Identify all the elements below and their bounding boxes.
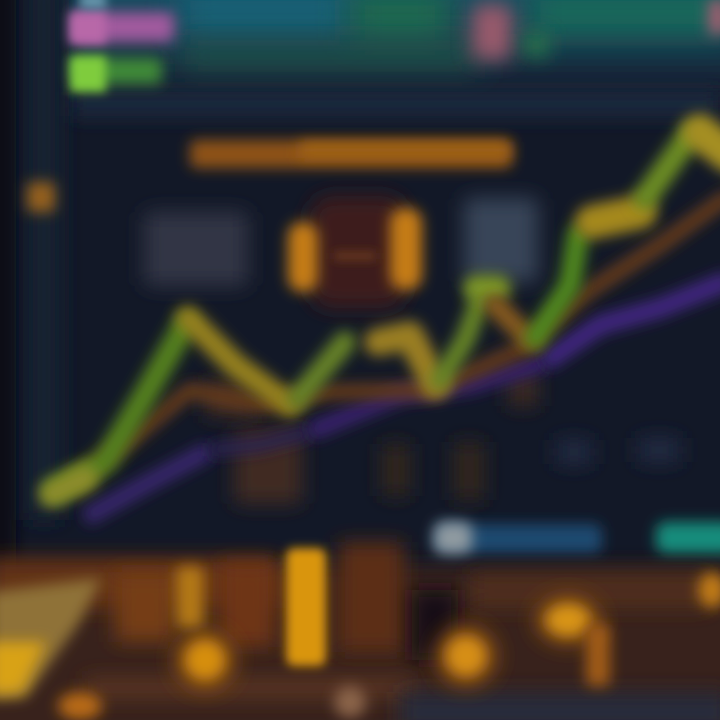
line chart: purple series (85, 280, 720, 518)
line chart: orange series (70, 195, 720, 485)
top pink marker (472, 0, 720, 60)
bottom-right buttons (434, 522, 720, 554)
left axis strip (0, 0, 62, 720)
gold coins and bars (58, 548, 720, 720)
grey panel right (464, 198, 538, 282)
title bar (190, 140, 512, 168)
panel: bottom coin pile (0, 542, 720, 720)
line chart: green and yellow series (52, 132, 720, 494)
left axis orange tag (27, 182, 55, 212)
panel: top header band (70, 0, 720, 116)
central orange bracket icon (288, 196, 422, 308)
lower candle bars (205, 372, 680, 504)
legend: top-left swatches (70, 0, 174, 92)
left gold wedge (0, 578, 102, 700)
grey panel left (144, 212, 248, 286)
